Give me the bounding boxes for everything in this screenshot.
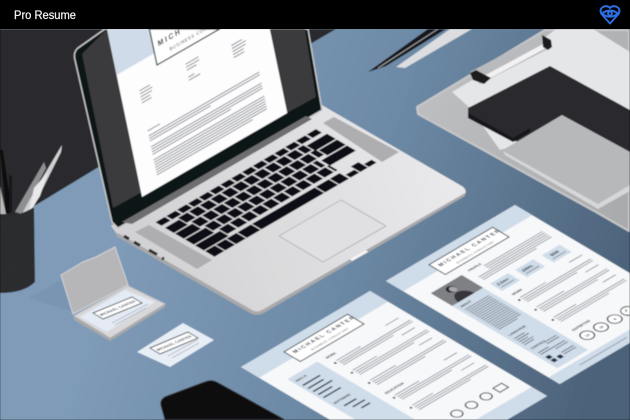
keyboard bbox=[158, 130, 376, 257]
card in case bbox=[80, 290, 155, 332]
sheet bbox=[386, 205, 630, 384]
hinge strip bbox=[122, 116, 312, 224]
photo bbox=[431, 275, 483, 306]
stat box 3 bbox=[542, 245, 572, 262]
screen letter text bbox=[139, 27, 267, 175]
sidebar with skill bars: SKILLS bbox=[294, 374, 309, 382]
header bar bbox=[0, 0, 630, 29]
expertise rings: 13 bbox=[584, 333, 591, 338]
stat box 1 bbox=[490, 273, 520, 291]
laptop screen bbox=[82, 29, 316, 208]
document on screen bbox=[107, 11, 287, 197]
name box: BUSINESS CONSULTANT bbox=[455, 240, 496, 264]
header band bbox=[386, 205, 532, 291]
profile text: PROFILE bbox=[467, 262, 484, 272]
case lid bbox=[61, 247, 128, 314]
name box: MICHAEL CANTER bbox=[437, 228, 504, 268]
work experience: WORK bbox=[324, 352, 338, 360]
sidebar with skill bars: SOFTWARE bbox=[332, 393, 353, 405]
trackpad bbox=[279, 200, 386, 262]
clipboard board bbox=[417, 30, 629, 231]
resume: back sheet bbox=[386, 205, 630, 384]
name box: BUSINESS CONSULTANT bbox=[310, 327, 351, 351]
ports bbox=[124, 236, 164, 259]
mesh cup bbox=[0, 207, 35, 293]
sidebar: CONTACT bbox=[530, 339, 548, 350]
profile text bbox=[467, 228, 554, 280]
header band bbox=[241, 291, 388, 378]
name box bbox=[284, 313, 366, 362]
expertise rings: EXPERTISE bbox=[571, 319, 592, 332]
case base bbox=[74, 286, 165, 338]
sidebar: ABOUT bbox=[459, 299, 474, 308]
resume: front sheet bbox=[241, 291, 547, 420]
work experience bbox=[324, 313, 491, 412]
sidebar bbox=[452, 288, 588, 368]
expertise rings: 8 bbox=[613, 318, 618, 321]
card in case frame: MICHAEL CANTER bbox=[98, 299, 137, 317]
sidebar with skill bars bbox=[287, 362, 415, 420]
left speaker bbox=[135, 225, 212, 269]
stat box 3: $5M bbox=[549, 250, 561, 257]
sidebar: LANGUAGE bbox=[507, 324, 528, 337]
stat box 2 bbox=[515, 259, 545, 277]
icon: heart with eye bbox=[601, 6, 619, 23]
black notebook bbox=[468, 66, 630, 152]
paper sheet bbox=[452, 29, 630, 150]
work experience bbox=[509, 253, 629, 324]
expertise rings: 10 bbox=[598, 325, 605, 329]
footer band bbox=[477, 387, 547, 420]
stat box 2: 200% bbox=[520, 264, 535, 273]
work experience: EDUCATION bbox=[384, 382, 406, 395]
business card bbox=[137, 323, 214, 367]
clipboard bbox=[417, 29, 630, 231]
right speaker bbox=[323, 117, 399, 162]
screen name box: BUSINESS CONS bbox=[169, 24, 211, 52]
name box: MICHAEL CANTER bbox=[292, 315, 358, 354]
brand title: Pro Resume bbox=[14, 8, 76, 22]
interest icons bbox=[448, 383, 509, 419]
pencil holder bbox=[0, 145, 62, 293]
name box bbox=[429, 226, 511, 274]
screen name box bbox=[149, 11, 220, 65]
laptop base bbox=[112, 106, 465, 312]
card frame: MICHAEL CANTER bbox=[155, 334, 193, 352]
expertise rings: 5 bbox=[625, 309, 627, 313]
footer band bbox=[548, 329, 630, 384]
dark panel top left bbox=[0, 29, 336, 225]
screen document band bbox=[107, 29, 196, 75]
sheet bbox=[241, 291, 547, 420]
metal clip bbox=[470, 35, 552, 84]
social icons bbox=[545, 351, 564, 362]
screen name box: MICH bbox=[157, 26, 182, 48]
laptop bbox=[74, 11, 465, 315]
stat box 1: 2.5m+ bbox=[495, 277, 511, 286]
case shadow bbox=[28, 280, 73, 312]
expertise rings bbox=[569, 306, 630, 341]
pens on the desk bbox=[368, 29, 472, 72]
business card case bbox=[28, 247, 165, 341]
pens in holder bbox=[0, 145, 62, 214]
grey notebook bbox=[503, 115, 630, 206]
phone bbox=[161, 381, 284, 419]
work experience: WORK bbox=[511, 288, 524, 296]
laptop lid bbox=[74, 29, 322, 228]
front notch bbox=[350, 250, 368, 261]
